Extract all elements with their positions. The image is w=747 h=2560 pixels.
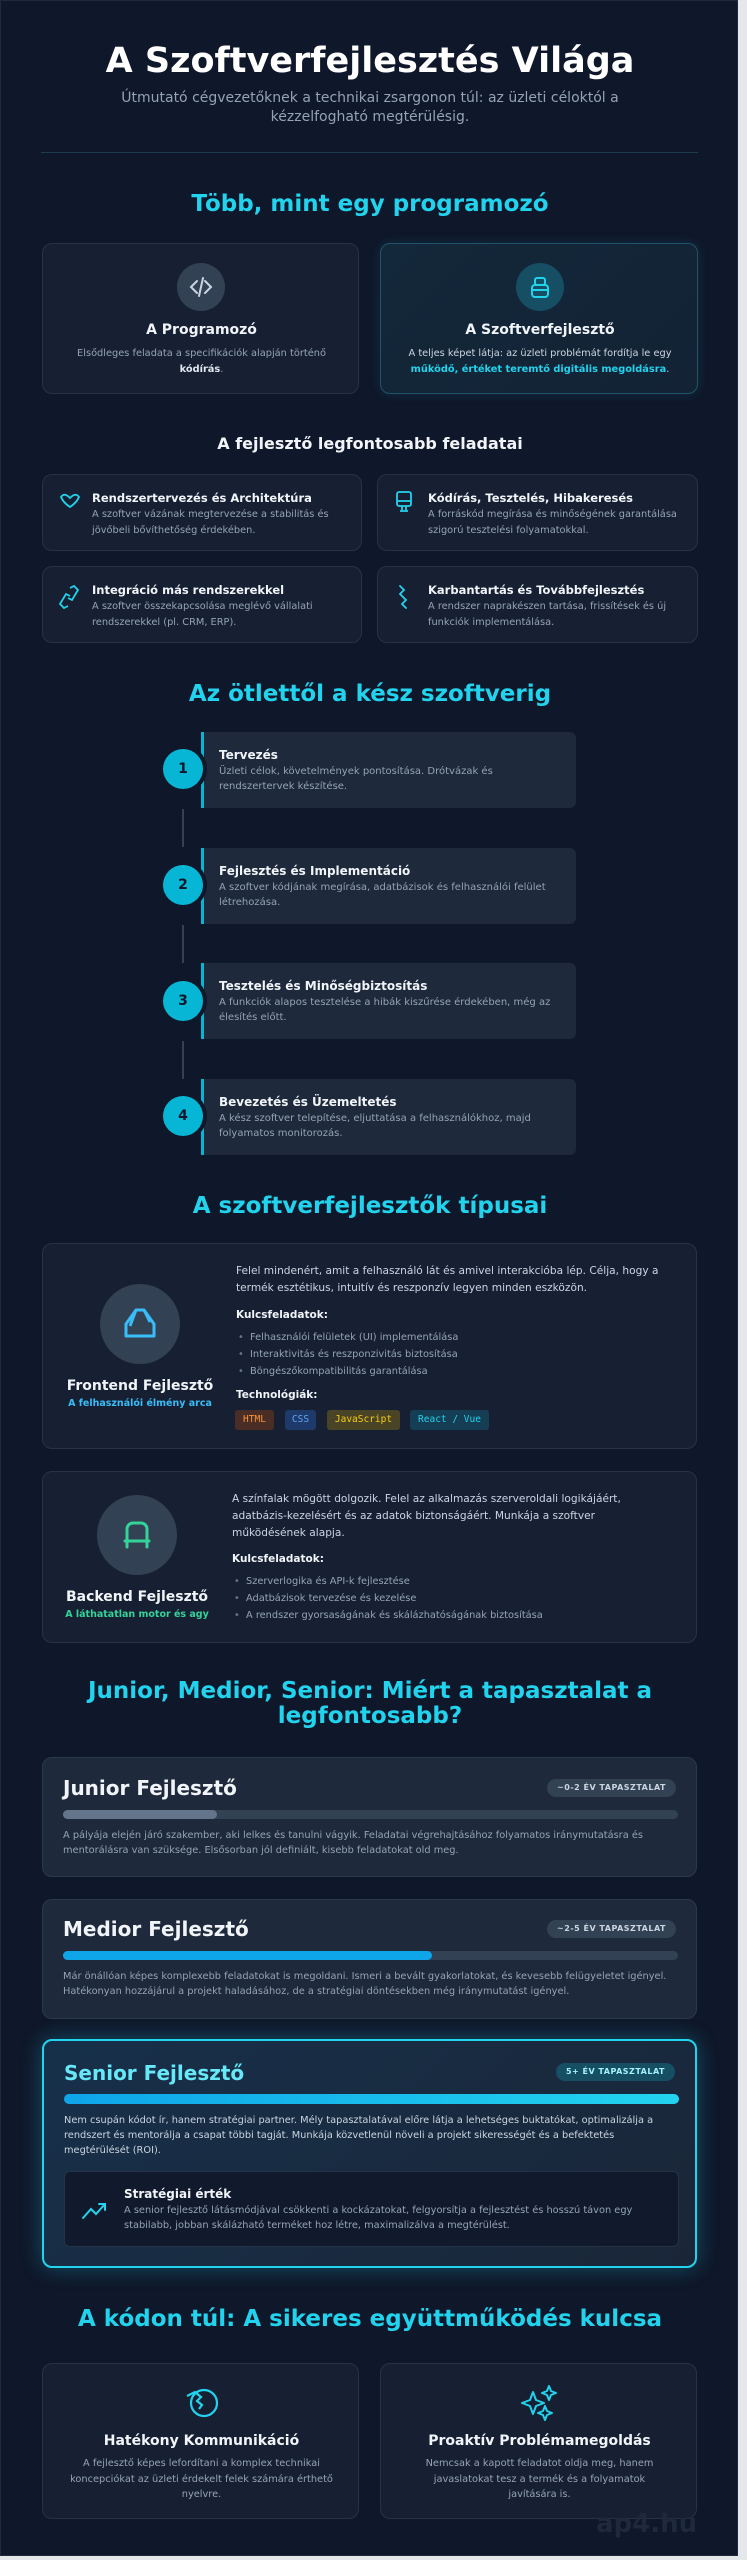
callout: strategic value: Stratégiai érték [124, 2187, 231, 2201]
step 1: Tervezés [219, 748, 278, 762]
task: architecture [42, 474, 362, 551]
step 3: Tesztelés és Minőségbiztosítás [219, 979, 427, 993]
step 3 [201, 963, 576, 1039]
panel: junior: Junior Fejlesztő [63, 1776, 237, 1800]
panel: junior: A pályája elején járó szakember, aki lelkes és tanulni vágyik. Feladatai végrehajtásához folyamatos iránymutatásra és mentorálásra van szüksége. Elsősorban jól definiált, kisebb feladatokat old meg. [63, 1830, 643, 1856]
panel: communication: Hatékony Kommunikáció [104, 2433, 299, 2449]
tags: CSS [292, 1414, 309, 1425]
icon: frontend [100, 1284, 180, 1364]
step 2 number: 2 [178, 877, 188, 893]
step 1 number [163, 749, 203, 789]
task: maintenance [377, 566, 698, 643]
task: coding: A forráskód megírása és minőségének garantálása szigorú tesztelési folyamatokkal. [428, 509, 677, 536]
panel: senior: Senior Fejlesztő [64, 2061, 244, 2085]
title: programmer: A Programozó [146, 322, 257, 338]
step 2: Fejlesztés és Implementáció [219, 864, 410, 878]
icon: monitor [396, 491, 412, 512]
panel: senior: Nem csupán kódot ír, hanem stratégiai partner. Mély tapasztalatával előre látja a lehetséges buktatókat, optimalizálja a rendszert és mentorálja a csapat többi tagját. Munkája közvetlenül növeli a projekt sikerességét és a befektetés megtérülését (ROI). [64, 2115, 653, 2156]
step 4 [201, 1079, 576, 1155]
panel: frontend: Technológiák: [236, 1389, 317, 1401]
panel: proactive [380, 2363, 697, 2519]
text: frontend: Felel mindenért, amit a felhasználó lát és amivel interakcióba lép. Célja, hogy a termék esztétikus, intuitív és reszponzív legyen minden eszközön. [236, 1265, 658, 1294]
text: backend: A színfalak mögött dolgozik. Felel az alkalmazás szerveroldali logikájáért, adatbázis-kezelésért és az adatok biztonságáért. Munkája a szoftver működésének alapja. [232, 1493, 621, 1539]
panel: backend: Szerverlogika és API-k fejlesztése [246, 1576, 410, 1587]
heading: experience: Junior, Medior, Senior: Miért a tapasztalat a legfontosabb? [88, 1678, 652, 1729]
panel: backend: Adatbázisok tervezése és kezelése [246, 1593, 416, 1604]
task: integration: Integráció más rendszerekkel [92, 583, 284, 597]
heading: beyond code: A kódon túl: A sikeres együttműködés kulcsa [78, 2306, 662, 2332]
heading: process: Az ötlettől a kész szoftverig [189, 681, 551, 707]
panel: backend: A láthatatlan motor és agy [65, 1609, 209, 1620]
task: integration [42, 566, 362, 643]
text: programmer: Elsődleges feladata a specifikációk alapján történő kódírás. [77, 348, 326, 374]
tags [235, 1410, 489, 1430]
icon: backend [97, 1495, 177, 1575]
panel: senior [42, 2039, 697, 2268]
step 2: A szoftver kódjának megírása, adatbázisok és felhasználói felület létrehozása. [219, 882, 546, 908]
heading: types: A szoftverfejlesztők típusai [193, 1193, 547, 1219]
title: backend: Backend Fejlesztő [66, 1589, 208, 1605]
panel: developer [380, 243, 698, 394]
bar: junior [63, 1810, 678, 1819]
icon: handshake [60, 494, 80, 508]
step 4 number: 4 [178, 1108, 188, 1124]
step 3 number [163, 981, 203, 1021]
step 2 [201, 848, 576, 924]
task: integration: A szoftver összekapcsolása meglévő vállalati rendszerekkel (pl. CRM, ERP). [92, 601, 313, 628]
panel: backend: A rendszer gyorsaságának és skálázhatóságának biztosítása [246, 1610, 543, 1621]
panel: junior [42, 1757, 697, 1877]
panel: frontend: Felhasználói felületek (UI) implementálása [250, 1332, 458, 1343]
step 2 number [163, 865, 203, 905]
panel: proactive: Nemcsak a kapott feladatot oldja meg, hanem javaslatokat tesz a termék és a folyamatok javítására is. [426, 2458, 653, 2500]
tags: React / Vue [418, 1414, 481, 1425]
task: architecture: Rendszertervezés és Architektúra [92, 491, 312, 505]
bar: senior [64, 2094, 679, 2104]
text: developer: A teljes képet látja: az üzleti problémát fordítja le egy működő, értéket teremtő digitális megoldásra. [408, 348, 672, 374]
panel: communication: A fejlesztő képes lefordítani a komplex technikai koncepciókat az üzleti érdekelt felek számára érthető nyelvre. [70, 2458, 333, 2500]
heading: key tasks: A fejlesztő legfontosabb feladatai [217, 434, 523, 453]
icon: wrench [398, 585, 408, 609]
icon: developer [516, 263, 564, 311]
callout: strategic value: A senior fejlesztő látásmódjával csökkenti a kockázatokat, felgyorsítja a fejlesztést és hosszú távon egy stabilabb, jobban skálázható terméket hoz létre, maximalizálva a megtérülést. [124, 2205, 632, 2231]
step 4: Bevezetés és Üzemeltetés [219, 1095, 397, 1109]
panel: frontend: Böngészőkompatibilitás garantálása [250, 1366, 428, 1377]
icon: communication [186, 2388, 218, 2418]
panel: backend: Kulcsfeladatok: [232, 1553, 324, 1565]
title: A Szoftverfejlesztés Világa [106, 41, 634, 81]
panel: senior: 5+ ÉV TAPASZTALAT [566, 2067, 665, 2076]
step 1 [201, 732, 576, 808]
task: maintenance: Karbantartás és Továbbfejlesztés [428, 583, 644, 597]
task: architecture: A szoftver vázának megtervezése a stabilitás és jövőbeli bővíthetőség érdekében. [92, 509, 329, 536]
step 4 number [163, 1096, 203, 1136]
task: coding: Kódírás, Tesztelés, Hibakeresés [428, 491, 633, 505]
watermark: ap4.hu [596, 2509, 697, 2539]
icon: trend [82, 2203, 106, 2219]
tags: JavaScript [335, 1414, 392, 1425]
task: coding [377, 474, 698, 551]
icon: sparkles [521, 2385, 557, 2421]
subtitle: Útmutató cégvezetőknek a technikai zsargonon túl: az üzleti céloktól a kézzelfogható megtérülésig. [121, 90, 619, 125]
step 3: A funkciók alapos tesztelése a hibák kiszűrése érdekében, még az élesítés előtt. [219, 997, 550, 1023]
panel: medior: Medior Fejlesztő [63, 1917, 249, 1941]
icon: code [177, 263, 225, 311]
panel: frontend: A felhasználói élmény arca [68, 1398, 212, 1409]
step 1: Üzleti célok, követelmények pontosítása. Drótvázak és rendszertervek készítése. [219, 766, 493, 792]
step 1 number: 1 [178, 761, 188, 777]
panel: proactive: Proaktív Problémamegoldás [428, 2433, 651, 2449]
title: developer: A Szoftverfejlesztő [465, 322, 615, 338]
title: frontend: Frontend Fejlesztő [67, 1378, 213, 1394]
bar: medior [63, 1951, 678, 1960]
panel: medior [42, 1899, 697, 2019]
heading: more than a programmer: Több, mint egy programozó [191, 191, 549, 217]
callout: strategic value [64, 2171, 679, 2247]
panel: medior: ~2-5 ÉV TAPASZTALAT [557, 1924, 666, 1933]
step 3 number: 3 [178, 993, 188, 1009]
panel: communication [42, 2363, 359, 2519]
step 4: A kész szoftver telepítése, eljuttatása a felhasználókhoz, majd folyamatos monitorozás. [219, 1113, 531, 1139]
panel: junior: ~0-2 ÉV TAPASZTALAT [557, 1783, 666, 1792]
icon: link [58, 584, 80, 610]
tags: HTML [243, 1414, 266, 1425]
panel: programmer [42, 243, 359, 394]
panel: medior: Már önállóan képes komplexebb feladatokat is megoldani. Ismeri a bevált gyakorlatokat, és kevesebb felügyeletet igényel. Hatékonyan hozzájárul a projekt haladásához, de a stratégiai döntésekben még iránymutatást igényel. [63, 1971, 666, 1997]
panel: frontend: Kulcsfeladatok: [236, 1309, 328, 1321]
task: maintenance: A rendszer naprakészen tartása, frissítések és új funkciók implementálása. [428, 601, 666, 628]
panel: frontend: Interaktivitás és reszponzivitás biztosítása [250, 1349, 458, 1360]
panel: backend [42, 1471, 697, 1643]
panel: frontend [42, 1243, 697, 1449]
